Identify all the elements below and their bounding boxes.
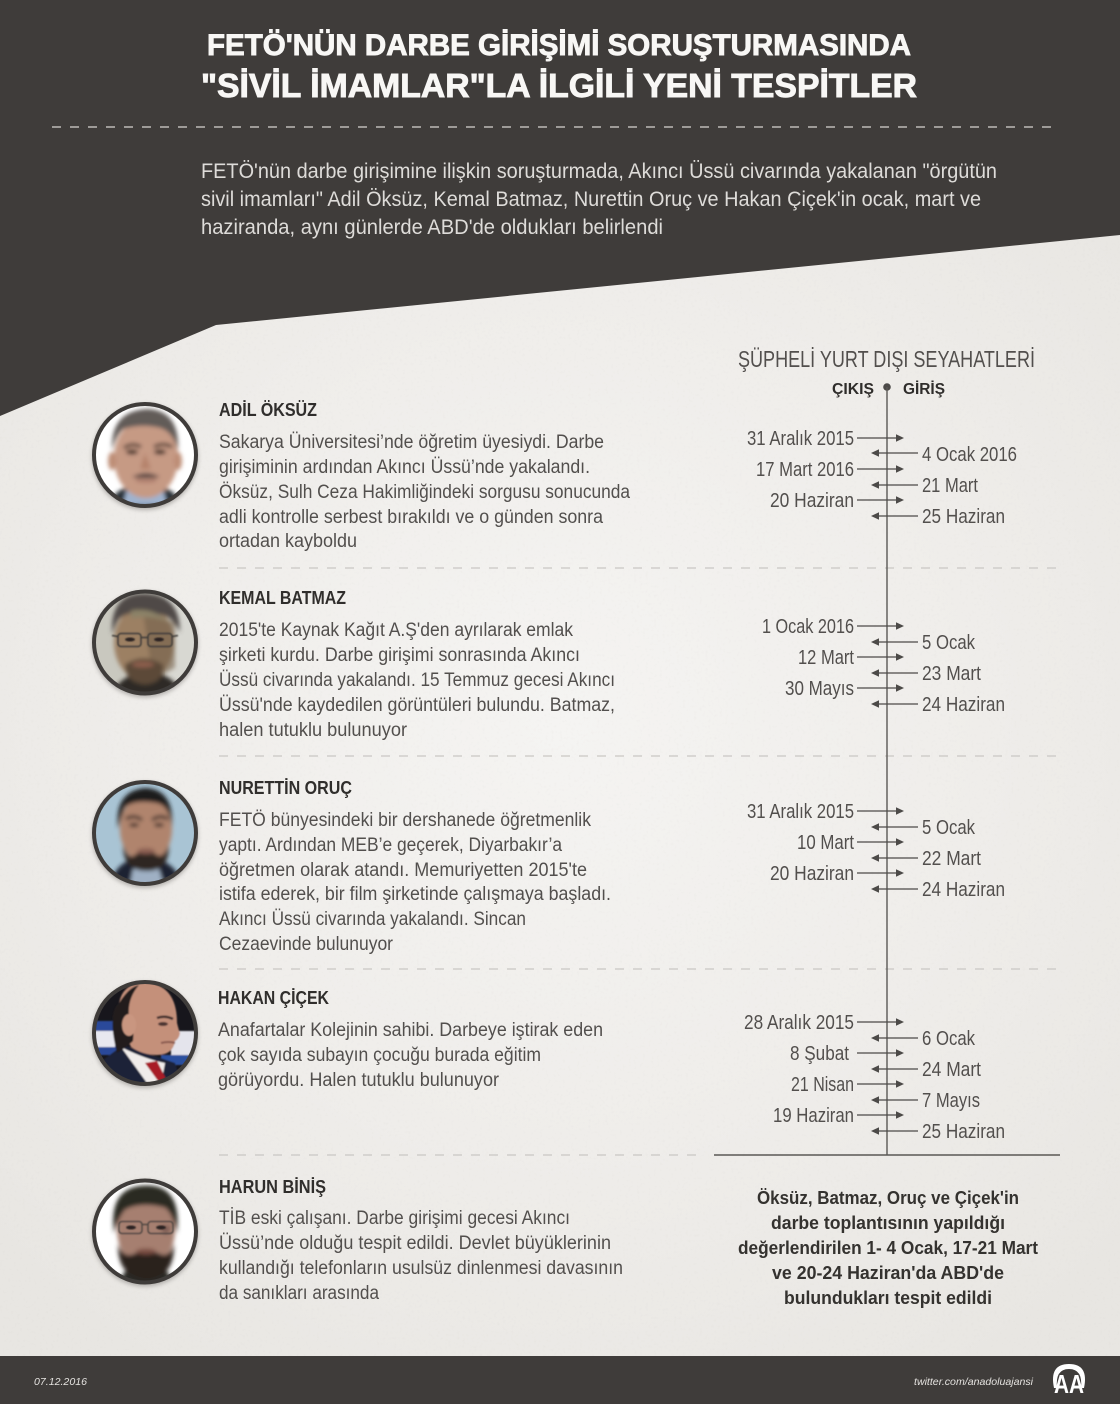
travel dates: Adil Öksüz: 21 Mart [922, 475, 978, 497]
icon: AA logo: AA [1054, 1369, 1084, 1399]
person: Adil Öksüz [219, 400, 630, 552]
travel dates: Adil Öksüz: 25 Haziran [922, 506, 1005, 528]
person: Adil Öksüz: Sakarya Üniversitesi’nde öğretim üyesiydi. Darbe [219, 432, 604, 453]
summary note: ve 20-24 Haziran'da ABD'de [772, 1263, 1004, 1283]
travel dates: Nurettin Oruç: 24 Haziran [922, 879, 1005, 901]
travel dates: Adil Öksüz: 31 Aralık 2015 [747, 428, 854, 450]
person: Nurettin Oruç: Akıncı Üssü civarında yakalandı. Sincan [219, 909, 526, 930]
travel dates: Kemal Batmaz: 5 Ocak [922, 632, 976, 654]
person: Hakan Çiçek [218, 988, 603, 1091]
timeline axis: ÇIKIŞ [832, 381, 874, 398]
person: Harun Biniş: TİB eski çalışanı. Darbe girişimi gecesi Akıncı [219, 1208, 570, 1229]
person: Harun Biniş: Üssü’nde olduğu tespit edildi. Devlet büyüklerinin [219, 1233, 611, 1254]
travel dates: Hakan Çiçek: 8 Şubat [790, 1043, 849, 1065]
travel dates: Nurettin Oruç: 31 Aralık 2015 [747, 801, 854, 823]
person: Adil Öksüz: ADİL ÖKSÜZ [219, 400, 317, 420]
person: Kemal Batmaz: Üssü'nde kaydedilen görüntüleri bulundu. Batmaz, [219, 695, 615, 716]
person: Harun Biniş: HARUN BİNİŞ [219, 1177, 326, 1197]
portrait: Harun Biniş [92, 1178, 198, 1288]
person: Nurettin Oruç: istifa ederek, bir film şirketinde çalışmaya başladı. [219, 884, 611, 905]
person: Nurettin Oruç [219, 778, 611, 955]
travel dates: Kemal Batmaz: 12 Mart [798, 647, 854, 669]
summary note: darbe toplantısının yapıldığı [771, 1213, 1005, 1233]
timeline axis [714, 380, 1060, 1155]
person: Hakan Çiçek: görüyordu. Halen tutuklu bulunuyor [218, 1070, 500, 1091]
travel dates: Nurettin Oruç: 20 Haziran [770, 863, 854, 885]
person: Nurettin Oruç: yaptı. Ardından MEB’e geçerek, Diyarbakır’a [219, 835, 562, 856]
person: Nurettin Oruç: NURETTİN ORUÇ [219, 778, 352, 798]
travel dates: Kemal Batmaz: 24 Haziran [922, 694, 1005, 716]
person: Kemal Batmaz: şirketi kurdu. Darbe girişimi sonrasında Akıncı [219, 645, 580, 666]
travel dates: Nurettin Oruç: 5 Ocak [922, 817, 976, 839]
person: Harun Biniş: kullandığı telefonların usulsüz dinlenmesi davasının [219, 1258, 623, 1279]
person: Adil Öksüz: ortadan kayboldu [219, 531, 357, 552]
date: 07.12.2016 [34, 1377, 87, 1388]
social handle: twitter.com/anadoluajansi [914, 1376, 1034, 1388]
portrait: Hakan Çiçek [92, 980, 198, 1089]
travel dates: Hakan Çiçek: 24 Mart [922, 1059, 981, 1081]
travel dates: Kemal Batmaz: 30 Mayıs [785, 678, 854, 700]
travel dates: Adil Öksüz [747, 428, 1017, 528]
person: Adil Öksüz: adli kontrolle serbest bırakıldı ve o günden sonra [219, 507, 603, 528]
footer bar [0, 1356, 1120, 1404]
travel dates: Nurettin Oruç: 22 Mart [922, 848, 981, 870]
travel dates: Hakan Çiçek: 6 Ocak [922, 1028, 976, 1050]
person: Hakan Çiçek: HAKAN ÇİÇEK [218, 988, 329, 1008]
person: Adil Öksüz: girişiminin ardından Akıncı Üssü’nde yakalandı. [219, 457, 590, 478]
title: "SİVİL İMAMLAR"LA İLGİLİ YENİ TESPİTLER [201, 67, 917, 104]
travel dates: Hakan Çiçek: 19 Haziran [773, 1105, 854, 1127]
person: Hakan Çiçek: Anafartalar Kolejinin sahibi. Darbeye iştirak eden [218, 1020, 603, 1041]
summary note [738, 1188, 1038, 1308]
title [201, 29, 917, 104]
intro text: haziranda, aynı günlerde ABD'de oldukları belirlendi [201, 216, 663, 239]
title: FETÖ'NÜN DARBE GİRİŞİMİ SORUŞTURMASINDA [207, 29, 911, 62]
intro text: FETÖ'nün darbe girişimine ilişkin soruşturmada, Akıncı Üssü civarında yakalanan "örgütün [201, 160, 997, 183]
travel dates: Hakan Çiçek: 25 Haziran [922, 1121, 1005, 1143]
person: Hakan Çiçek: çok sayıda subayın çocuğu burada eğitim [218, 1045, 541, 1066]
portrait: Kemal Batmaz [92, 590, 198, 698]
travel dates: Hakan Çiçek: 28 Aralık 2015 [744, 1012, 854, 1034]
summary note: değerlendirilen 1- 4 Ocak, 17-21 Mart [738, 1238, 1038, 1258]
header band [0, 0, 1120, 416]
timeline title: ŞÜPHELİ YURT DIŞI SEYAHATLERİ [738, 346, 1035, 372]
intro text [201, 160, 997, 239]
person: Kemal Batmaz: halen tutuklu bulunuyor [219, 720, 408, 741]
travel dates: Kemal Batmaz: 23 Mart [922, 663, 981, 685]
travel dates: Adil Öksüz: 17 Mart 2016 [756, 459, 854, 481]
travel dates: Adil Öksüz: 4 Ocak 2016 [922, 444, 1017, 466]
timeline axis: GİRİŞ [903, 380, 945, 398]
travel dates: Hakan Çiçek: 7 Mayıs [922, 1090, 980, 1112]
person: Nurettin Oruç: FETÖ bünyesindeki bir dershanede öğretmenlik [219, 810, 591, 831]
travel dates: Nurettin Oruç: 10 Mart [797, 832, 854, 854]
travel dates: Kemal Batmaz: 1 Ocak 2016 [762, 616, 854, 638]
portrait: Adil Öksüz [92, 402, 198, 511]
travel dates: Kemal Batmaz [762, 616, 1005, 716]
person: Nurettin Oruç: Cezaevinde bulunuyor [219, 934, 394, 955]
person: Harun Biniş: da sanıkları arasında [219, 1283, 379, 1304]
person: Harun Biniş [219, 1177, 623, 1304]
intro text: sivil imamları" Adil Öksüz, Kemal Batmaz, Nurettin Oruç ve Hakan Çiçek'in ocak, mart ve [201, 188, 981, 211]
person: Kemal Batmaz [219, 588, 615, 741]
travel dates: Nurettin Oruç [747, 801, 1005, 901]
travel dates: Hakan Çiçek [744, 1012, 1005, 1143]
summary note: Öksüz, Batmaz, Oruç ve Çiçek'in [757, 1188, 1019, 1208]
portrait: Nurettin Oruç [92, 780, 198, 889]
person: Kemal Batmaz: Üssü civarında yakalandı. 15 Temmuz gecesi Akıncı [219, 670, 615, 691]
person: Adil Öksüz: Öksüz, Sulh Ceza Hakimliğindeki sorgusu sonucunda [219, 482, 630, 503]
summary note: bulundukları tespit edildi [784, 1288, 992, 1308]
travel dates: Adil Öksüz: 20 Haziran [770, 490, 854, 512]
travel dates: Hakan Çiçek: 21 Nisan [791, 1074, 854, 1096]
person: Nurettin Oruç: öğretmen olarak atandı. Memuriyetten 2015'te [219, 860, 587, 881]
person: Kemal Batmaz: 2015'te Kaynak Kağıt A.Ş'den ayrılarak emlak [219, 620, 573, 641]
person: Kemal Batmaz: KEMAL BATMAZ [219, 588, 346, 608]
